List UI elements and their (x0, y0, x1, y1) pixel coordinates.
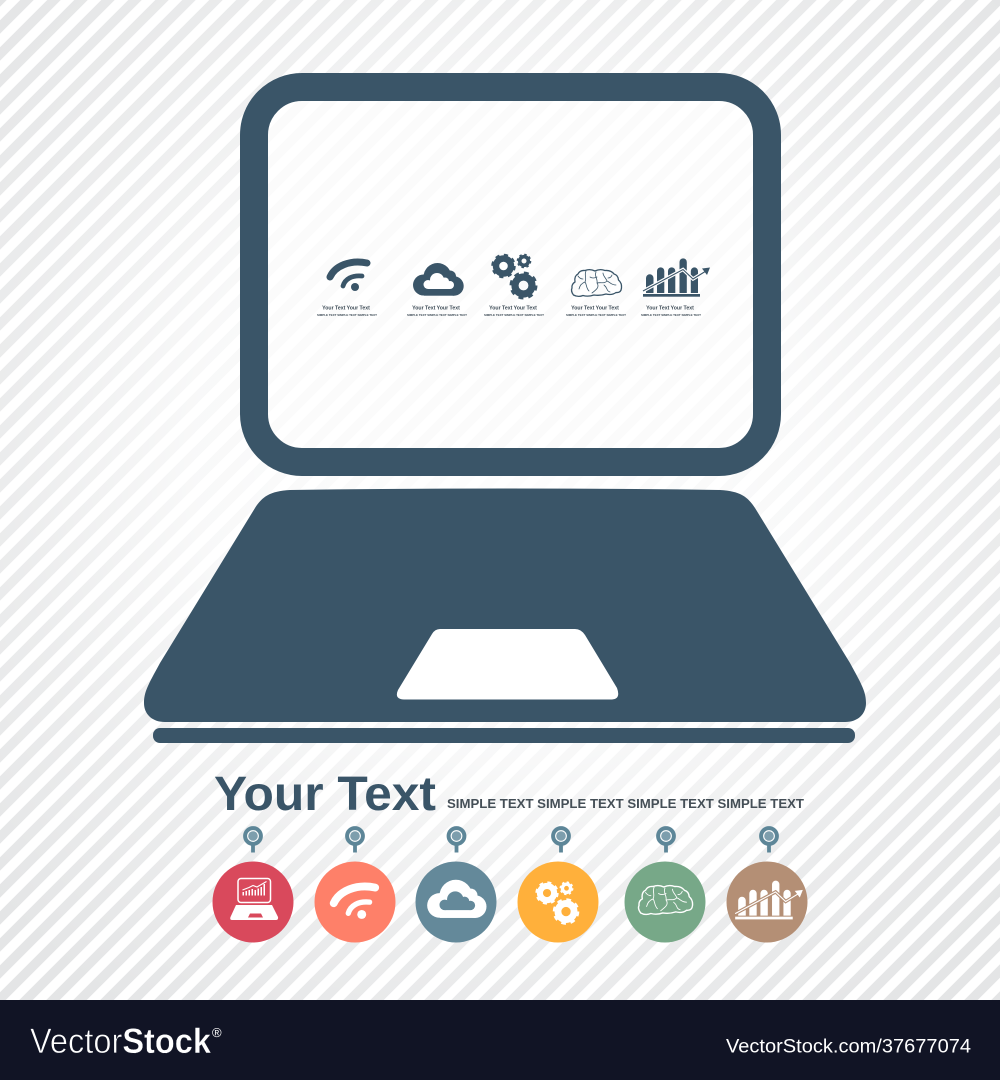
footer registered mark: ® (212, 1025, 222, 1040)
screen item: chart (641, 258, 710, 317)
screen item: gears: Your Text Your Text (489, 306, 537, 312)
screen item: brain: Your Text Your Text (571, 306, 619, 312)
footer bar (0, 1000, 1000, 1080)
screen icon row (317, 255, 710, 317)
screen item: chart: SIMPLE TEXT SIMPLE TEXT SIMPLE TEXT (641, 313, 701, 317)
circle icon: laptop (212, 862, 294, 942)
laptop illustration (144, 87, 866, 743)
screen faint stripes (268, 101, 753, 448)
pin 2 (347, 828, 363, 852)
screen item: gears: SIMPLE TEXT SIMPLE TEXT SIMPLE TEXT (484, 313, 544, 317)
footer logo: VectorStock (30, 1022, 211, 1061)
screen item: cloud (407, 263, 467, 317)
screen item: chart: Your Text Your Text (646, 306, 694, 312)
screen item: wifi (317, 262, 377, 317)
circle icon: cloud (416, 862, 496, 942)
laptop screen (254, 87, 767, 462)
subtitle: SIMPLE TEXT SIMPLE TEXT SIMPLE TEXT SIMPLE TEXT (447, 797, 804, 811)
circle icon: wifi (314, 862, 396, 942)
pin 6 (761, 828, 777, 852)
pin 5 (658, 828, 674, 852)
trackpad (397, 629, 618, 700)
pin markers (245, 828, 777, 852)
screen item: wifi: SIMPLE TEXT SIMPLE TEXT SIMPLE TEXT (317, 313, 377, 317)
screen item: cloud: SIMPLE TEXT SIMPLE TEXT SIMPLE TEXT (407, 313, 467, 317)
pin 3 (449, 828, 464, 852)
pin 4 (553, 828, 569, 852)
screen item: wifi: Your Text Your Text (322, 306, 370, 312)
laptop keyboard base (144, 488, 866, 722)
laptop bottom bar (153, 728, 855, 743)
title: Your Text (214, 768, 436, 821)
screen item: gears (484, 255, 544, 317)
screen item: cloud: Your Text Your Text (412, 306, 460, 312)
screen item: brain (566, 270, 626, 317)
footer url: VectorStock.com/37677074 (726, 1036, 971, 1058)
circle icon: gears (518, 862, 598, 942)
circle icon: brain (624, 862, 706, 942)
circle icon: chart (726, 862, 808, 942)
screen item: brain: SIMPLE TEXT SIMPLE TEXT SIMPLE TEXT (566, 313, 626, 317)
pin 1 (245, 828, 261, 852)
